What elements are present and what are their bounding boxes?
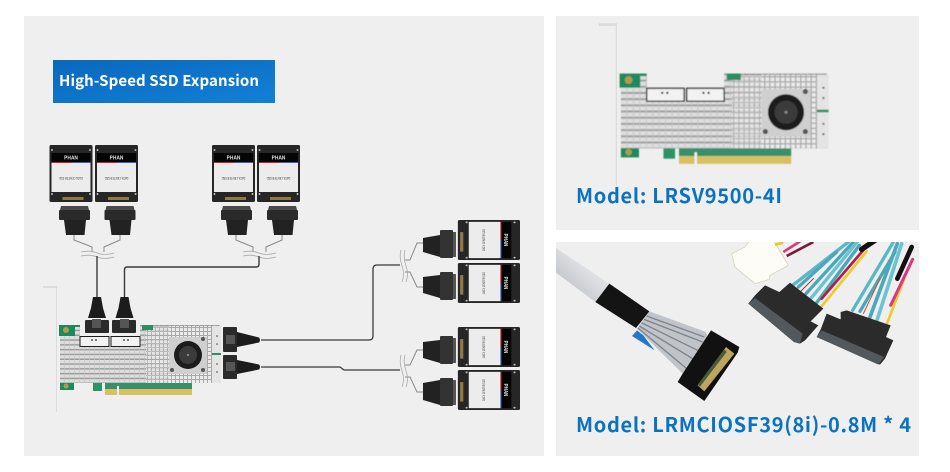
heading: High-Speed SSD Expansion xyxy=(53,60,275,103)
SSD 3 right column: PHAN xyxy=(502,340,510,354)
model label: LRSV9500-4I: Model: LRSV9500-4I xyxy=(576,180,782,209)
cables from card to right SSDs xyxy=(261,265,400,370)
heading: High-Speed SSD Expansion: High-Speed SSD Expansion xyxy=(59,70,259,91)
panel: high-speed SSD expansion diagram xyxy=(24,16,544,456)
SSD 3 top row: DATA CENTER SSD xyxy=(222,176,245,180)
SSD 3 right column: DATA CENTER SSD xyxy=(482,336,486,358)
SSD 4 top row xyxy=(257,145,300,202)
card top connectors xyxy=(85,297,136,333)
SSD 1 top row: DATA CENTER SSD xyxy=(59,176,83,180)
panel: card model xyxy=(556,16,919,230)
SFF connector one xyxy=(748,283,823,344)
SSD 4 right column: DATA CENTER SSD xyxy=(482,379,486,401)
SSD 4 right column xyxy=(458,370,520,410)
SSD 2 top row: DATA CENTER SSD xyxy=(105,176,128,180)
right-side plugs xyxy=(423,230,456,406)
SSD 3 right column xyxy=(458,327,520,367)
model label: LRMCIOSF39(8i)-0.8M * 4: Model: LRMCIOSF39(8i)-0.8M * 4 xyxy=(576,409,911,438)
SSD 1 right column: DATA CENTER SSD xyxy=(482,229,486,251)
product image: LRSV9500-4I card xyxy=(599,23,829,186)
SSD 2 right column: DATA CENTER SSD xyxy=(482,272,486,294)
panel: cable model xyxy=(554,240,919,456)
molex plug and SFF-8639 connectors with wires xyxy=(732,240,913,365)
SSD 1 right column xyxy=(458,220,520,260)
product image: cables xyxy=(554,240,913,401)
SSD 2 right column: PHAN xyxy=(502,276,510,290)
SSD 2 right column xyxy=(458,263,520,303)
SSD 4 top row: DATA CENTER SSD xyxy=(267,176,290,180)
PCIe expansion card diagram xyxy=(43,286,221,412)
SSD 4 right column: PHAN xyxy=(502,383,510,397)
SFF connector two xyxy=(817,310,893,365)
SSD 2 top row xyxy=(95,145,138,202)
SSD 3 top row: PHAN xyxy=(226,154,241,162)
card side connectors xyxy=(223,327,260,379)
SSD 1 right column: PHAN xyxy=(502,233,510,247)
wire bundle two xyxy=(853,242,913,323)
SSD 1 top row xyxy=(50,145,92,202)
wire bundle one xyxy=(793,240,875,307)
SSD 2 top row: PHAN xyxy=(109,154,124,162)
cables from card to top SSDs xyxy=(97,256,259,298)
SSD 4 top row: PHAN xyxy=(271,154,286,162)
right-side split wires xyxy=(400,243,423,392)
SSD 3 top row xyxy=(212,145,255,202)
flat ribbon cable with connector xyxy=(554,247,739,401)
SSD 1 top row: PHAN xyxy=(64,154,78,162)
top-row connectors and split wires xyxy=(59,206,298,258)
